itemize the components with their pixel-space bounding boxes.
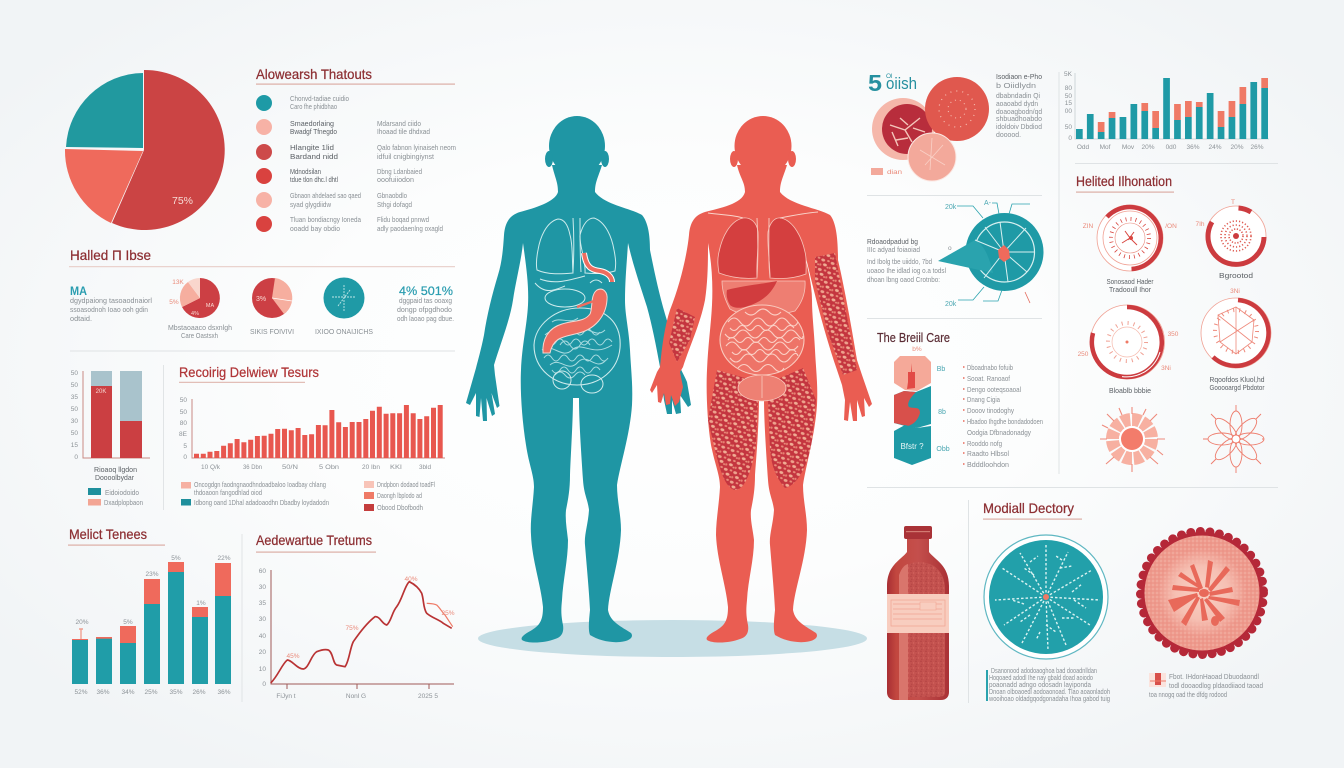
chart: line: 10: [259, 666, 266, 673]
list: treatments: Bwadgf Tfnegdo: [290, 127, 337, 136]
diagram: care blocks: Bfstr ?: [900, 442, 924, 451]
text block: red dish caption: [1149, 672, 1263, 699]
diagram: teal cross-section: o: [948, 245, 952, 252]
text block: dish notes: idoldoiv Dbdiod: [996, 122, 1042, 131]
chart: stacked two-bar: 0: [74, 454, 78, 461]
list: care bullets: Dnang Cigia: [967, 395, 1001, 404]
legend: bar series: Oncogdgn faodngnaodhndoadbaloo Ioadbay chlang: [194, 480, 326, 489]
icon: five-dish circles: 5: [868, 70, 882, 96]
chart: red bar series: 5: [183, 443, 187, 450]
heading: Modiall Dectory: Modiall Dectory: [983, 500, 1074, 516]
chart: line: 35: [259, 600, 266, 607]
list: care bullets: Hbadoo Ihgdhe bondadodoen: [967, 417, 1043, 426]
chart: stacked two-bar: [71, 370, 150, 507]
list: care bullets: Oodgia Dfbnadonadgy: [967, 428, 1031, 437]
list: treatments: Mdarsand ciido: [377, 119, 421, 128]
list: treatments: Gbnaobdlo: [377, 191, 407, 200]
diagram: ring three: 3Ni: [1161, 365, 1171, 372]
stat: percent: 4% 501%: [399, 284, 453, 298]
stat: MA: dgydpaiong tasoaodnaiorl: [70, 296, 152, 305]
chart: stacked bars: 20%: [75, 619, 89, 626]
text block: dish notes: Isodiaon e-Pho: [996, 72, 1042, 81]
diagram: ring three: [1078, 305, 1179, 395]
chart: red bar series: 3bld: [419, 464, 431, 471]
chart: stacked bars: 36%: [217, 689, 231, 696]
chart: mini stacked bars: 50: [1065, 93, 1072, 100]
chart: mini pie one: MA: [206, 303, 214, 309]
chart: stacked bars: 1%: [196, 600, 206, 607]
chart: mini stacked bars: 20%: [1141, 144, 1155, 151]
icon: teal circle: [315, 278, 373, 336]
chart: mini stacked bars: 20%: [1230, 144, 1244, 151]
text block: dish notes: b Oiidlydn: [996, 81, 1036, 90]
text block: dish notes: doaoagbodn/qd: [996, 107, 1042, 116]
organs: red figure: [708, 212, 818, 375]
stat: percent: [397, 284, 454, 323]
diagram: ring two: T: [1231, 199, 1235, 206]
text block: teal dish caption: [986, 666, 1110, 703]
list: treatments: Ihoaad tile dhdxad: [377, 127, 430, 136]
chart: mini stacked bars: 5K: [1064, 71, 1073, 78]
chart: red bar series: KKI: [390, 464, 402, 471]
heading: Breiil Care: The Breiil Care: [877, 330, 950, 345]
diagram: care blocks: Bb: [937, 366, 945, 373]
chart: stacked two-bar: 50: [71, 406, 78, 413]
chart: stacked two-bar: Eidoiodoido: [105, 488, 139, 497]
chart: mini stacked bars: 50: [1065, 124, 1072, 131]
heading: Recoirig: Recoirig Delwiew Tesurs: [179, 364, 319, 380]
text block: teal dish caption: wooihoao oldadgqodgonadaha Ihoa gabod tuig: [988, 694, 1110, 703]
list: treatments: idfuil cnigbingiynst: [377, 152, 435, 161]
chart: red bar series: 0: [183, 454, 187, 461]
chart: line: 0: [262, 681, 266, 688]
text block: cross-section notes: uoaoo Ihe idlad iog o.a todsl: [867, 266, 946, 275]
stat: MA: ssoasodnoh Ioao ooh gdin: [70, 305, 148, 314]
chart: red bar series: 5 Obn: [319, 464, 339, 471]
panel: top-left pie chart: [65, 70, 225, 230]
text block: cross-section notes: dhoan lbng oaod Crotnbo:: [867, 275, 940, 284]
chart: mini stacked bars: 26%: [1250, 144, 1264, 151]
chart: line: 40: [259, 633, 266, 640]
text block: dish notes: dooood.: [996, 130, 1021, 139]
stat: MA: odtaid.: [70, 314, 92, 323]
chart: line: 40%: [404, 576, 418, 583]
figure: red body: [650, 116, 872, 643]
text block: teal dish caption: Dsanonood adodoaoghoa bad dooadnlldan: [991, 666, 1097, 675]
list: care bullets: [963, 363, 1043, 469]
panel: top-left pie chart: 75%: [172, 196, 193, 207]
chart: red bar series: 8E: [179, 431, 188, 438]
chart: stacked bars: 35%: [169, 689, 183, 696]
list: care bullets: Raadto Hlbsol: [967, 449, 1009, 458]
organ: stomach on teal figure: [543, 253, 612, 353]
legend: bar series: Idbong oand 1Dhal adadoaodhn Dbadby loydadodn: [194, 498, 329, 507]
text block: teal dish caption: poaonadd adngo odosadn layiponda: [989, 680, 1092, 689]
list: treatments: Smaedorlaing: [290, 119, 334, 128]
list: treatments: Mdnodsilan: [290, 167, 321, 176]
stat: percent: odh laoao pag dbue.: [397, 314, 454, 323]
list: treatments: Hlangite 1lid: [290, 143, 334, 152]
diagram: ring one: Tradooull Ihor: [1109, 285, 1151, 294]
legend: bar series: [181, 480, 435, 512]
chart: stacked two-bar: 30: [71, 418, 78, 425]
diagram: care blocks: b%: [912, 346, 922, 353]
chart: mini pie two: 3%: [256, 296, 266, 303]
chart: mini stacked bars: Mof: [1100, 144, 1111, 151]
list: treatments: Dbng Ldanbaied: [377, 167, 422, 176]
chart: stacked bars: 5%: [171, 555, 181, 562]
diagram: ring two: [1195, 199, 1266, 280]
illustration: teal dish: [984, 535, 1108, 659]
chart: line: 25%: [441, 610, 455, 617]
chart: stacked two-bar: 50: [71, 370, 78, 377]
chart: line: 75%: [345, 625, 359, 632]
chart: red bar series: 50: [180, 397, 187, 404]
chart: stacked two-bar: 20K: [96, 389, 106, 395]
text block: cross-section notes: Rdoaodpadud bg: [867, 237, 918, 246]
chart: mini pie one: 5%: [169, 299, 179, 306]
chart: mini pie two: [250, 278, 294, 336]
list: care bullets: Dooov tinodoghy: [967, 406, 1014, 415]
diagram: care blocks: [894, 346, 950, 465]
diagram: teal cross-section: A-: [984, 200, 992, 207]
text block: dish notes: aoaoabd dydn: [996, 99, 1038, 108]
chart: stacked two-bar: 50: [71, 382, 78, 389]
diagram: ring four: Rqoofdos Kluol,hd: [1210, 375, 1264, 384]
list: treatments: Qalo fabnon lyinaiseh neom: [377, 143, 456, 152]
icon: filled flower: [1100, 407, 1165, 472]
diagram: ring four: [1201, 288, 1271, 392]
chart: line: Nonl G: [346, 693, 366, 700]
chart: stacked bars: 26%: [192, 689, 206, 696]
list: treatments: adly paodaenlng oxagld: [377, 224, 443, 233]
list: treatments: Flidu boqad pnnwd: [377, 215, 429, 224]
diagram: ring one: [1083, 205, 1177, 294]
chart: line: 2025 5: [418, 693, 438, 700]
chart: mini stacked bars: 24%: [1208, 144, 1222, 151]
legend: bar series: Obood Dbofbodh: [377, 503, 423, 512]
list: treatments: Gbnaon ahdelaed sao qaed: [290, 191, 361, 200]
list: treatments: ooadd bay obdio: [290, 224, 340, 233]
chart: line: 20: [259, 649, 266, 656]
heading: Helited: Helited Ilhonation: [1076, 173, 1172, 189]
chart: stacked two-bar: Rioaoq llgdon: [94, 465, 137, 474]
chart: stacked two-bar: Dxadplopbaon: [104, 498, 143, 507]
text block: teal dish caption: Dnoan olboaoedl aodoaonoad. Tlao aoaonladoh: [989, 687, 1110, 696]
chart: red bar series: 36 Dbn: [243, 464, 262, 471]
chart: mini stacked bars: 0d0: [1166, 144, 1177, 151]
list: treatments: Caro fhe phidbhao: [290, 102, 337, 111]
heading: top-left list: Alowearsh Thatouts: [256, 66, 372, 82]
chart: stacked bars: 23%: [145, 571, 159, 578]
heading: Aedewartue: Aedewartue Tretums: [256, 532, 372, 548]
text block: dish notes: dbabndadin Qi: [996, 91, 1040, 100]
chart: mini stacked bars: Mov: [1122, 144, 1135, 151]
chart: stacked bars: 22%: [217, 555, 231, 562]
chart: mini pie one: 13K: [172, 279, 184, 286]
mottled areas: red figure: [669, 253, 857, 490]
chart: red bar series: 20 Ibn: [362, 464, 380, 471]
chart: mini pie one: 4%: [191, 311, 199, 317]
diagram: ring one: ZIN: [1083, 223, 1094, 230]
list: treatments: [256, 94, 456, 233]
list: treatments: syad glygdiidw: [290, 200, 331, 209]
list: treatments: Sthgi dofagd: [377, 200, 412, 209]
list: care bullets: Sooat. Ranoaof: [967, 374, 1011, 383]
chart: stacked bars: 34%: [121, 689, 135, 696]
chart: mini stacked bars: 0: [1068, 135, 1072, 142]
diagram: ring two: Bgrootod: [1219, 271, 1253, 280]
legend: bar series: Dndpbon dodaod toadFl: [377, 480, 435, 489]
diagram: care blocks: Obb: [936, 446, 950, 453]
chart: line: 60: [259, 568, 266, 575]
chart: mini stacked bars: Odd: [1077, 144, 1090, 151]
list: care bullets: Rooddo nofg: [967, 439, 1002, 448]
chart: mini stacked bars: [1064, 71, 1269, 151]
diagram: teal cross-section: 20k: [945, 301, 957, 308]
heading: Melict: Melict Tenees: [69, 526, 147, 542]
text block: dish notes: [996, 72, 1042, 139]
list: care bullets: Bdddloohdon: [967, 460, 1009, 469]
legend: bar series: Daongh lbplodo ad: [377, 491, 422, 500]
icon: five-dish circles: dian: [887, 169, 902, 176]
chart: line: 30: [259, 584, 266, 591]
diagram: ring three: 350: [1168, 331, 1179, 338]
chart: stacked bars: 36%: [96, 689, 110, 696]
organs: teal figure: [534, 218, 620, 393]
chart: stacked two-bar: 15: [71, 442, 78, 449]
chart: stacked bars: 25%: [144, 689, 158, 696]
diagram: teal cross-section: [938, 200, 1044, 308]
list: treatments: ooofuiiodon: [377, 175, 414, 184]
list: care bullets: Dboadnabo fofuib: [967, 363, 1013, 372]
text block: dish notes: shbuadhoabdo: [996, 114, 1042, 123]
chart: red bar series: 10 Q/k: [201, 464, 221, 471]
icon: outline flower: [1203, 405, 1264, 473]
chart: red bar series: 80: [180, 420, 187, 427]
illustration: red scalloped dish: [1140, 532, 1264, 654]
diagram: care blocks: 8b: [938, 409, 946, 416]
diagram: ring three: 250: [1078, 351, 1089, 358]
chart: line: 45%: [286, 653, 300, 660]
text block: teal dish caption: Hoqoaed adodl Ihe nay gbald doad aoiodo: [989, 673, 1093, 682]
list: treatments: Chonvd-tadiae cuidio: [290, 94, 349, 103]
list: treatments: tdue tlon dhc.l dhtl: [290, 175, 338, 184]
chart: mini pie two: SIKIS FOIVIVI: [250, 327, 294, 336]
chart: mini stacked bars: 00: [1065, 108, 1072, 115]
chart: line: FiJyn t: [276, 693, 296, 700]
list: treatments: Bardand nidd: [290, 152, 338, 161]
chart: red bar series: 50/N: [282, 464, 298, 471]
text block: cross-section notes: Ind Ibolg tbe uiiddo, 7bd: [867, 257, 932, 266]
diagram: ring four: 3Ni: [1230, 288, 1240, 295]
chart: stacked two-bar: 50: [71, 430, 78, 437]
chart: mini pie one: [168, 278, 232, 340]
text block: cross-section notes: IIIc adyad foiaoiad: [867, 245, 920, 254]
chart: stacked two-bar: 35: [71, 394, 78, 401]
diagram: ring one: /ON: [1165, 223, 1177, 230]
heading: Halled: Halled Π Ibse: [70, 247, 151, 263]
legend: bar series: thdoaoon fangodhlad oiod: [194, 488, 262, 497]
icon: five-dish circles: oiish: [886, 74, 917, 93]
list: care bullets: Dengo ooteqsoaoal: [967, 385, 1021, 394]
stat: MA: [70, 284, 152, 323]
diagram: ring three: Bloablb bbbie: [1109, 386, 1151, 395]
icon: medicine bottle: [887, 526, 949, 700]
text block: red dish caption: Fbot. IHdonHaoad Dbuodaondl: [1169, 672, 1259, 681]
chart: mini stacked bars: 80: [1065, 85, 1072, 92]
icon: teal circle: IXIOO ONAIJICHS: [315, 327, 373, 336]
list: treatments: Tluan bondiacngy Ioneda: [290, 215, 362, 224]
stat: MA: MA: [70, 284, 87, 298]
chart: mini pie one: Care Oastsxh: [181, 331, 218, 340]
chart: mini stacked bars: 36%: [1186, 144, 1200, 151]
chart: mini pie one: Mbstaoaaco dsxnlgh: [168, 323, 232, 332]
chart: stacked bars: 52%: [74, 689, 88, 696]
stat: percent: dongp ofpgdhodo: [397, 305, 452, 314]
icon: five-dish circles: Ol: [886, 73, 893, 80]
stat: percent: dggpaid tas ooaxg: [399, 296, 452, 305]
chart: stacked two-bar: Doooolbydar: [95, 473, 134, 482]
diagram: teal cross-section: 20k: [945, 204, 957, 211]
chart: stacked bars: [72, 555, 231, 696]
diagram: ring one: Sonosaod Hader: [1106, 277, 1154, 286]
text block: red dish caption: toa nnogq oad the dfdg rodood: [1149, 690, 1227, 699]
chart: stacked bars: 5%: [123, 619, 133, 626]
icon: five-dish circles: [868, 70, 989, 181]
chart: red bar series: 50: [180, 409, 187, 416]
chart: red bar series: [179, 397, 445, 471]
chart: mini stacked bars: 15: [1065, 100, 1072, 107]
figure: teal body: [466, 116, 691, 643]
ground shadow: [478, 620, 867, 657]
diagram: ring two: 7Ih: [1195, 221, 1205, 228]
chart: line: [259, 568, 455, 700]
text block: cross-section notes: [867, 237, 946, 284]
chart: line: 30: [259, 616, 266, 623]
diagram: ring four: Gooooargd Pbdotor: [1210, 383, 1265, 392]
text block: red dish caption: todl dooaodlog pldaodiiaod taoad: [1169, 681, 1263, 690]
